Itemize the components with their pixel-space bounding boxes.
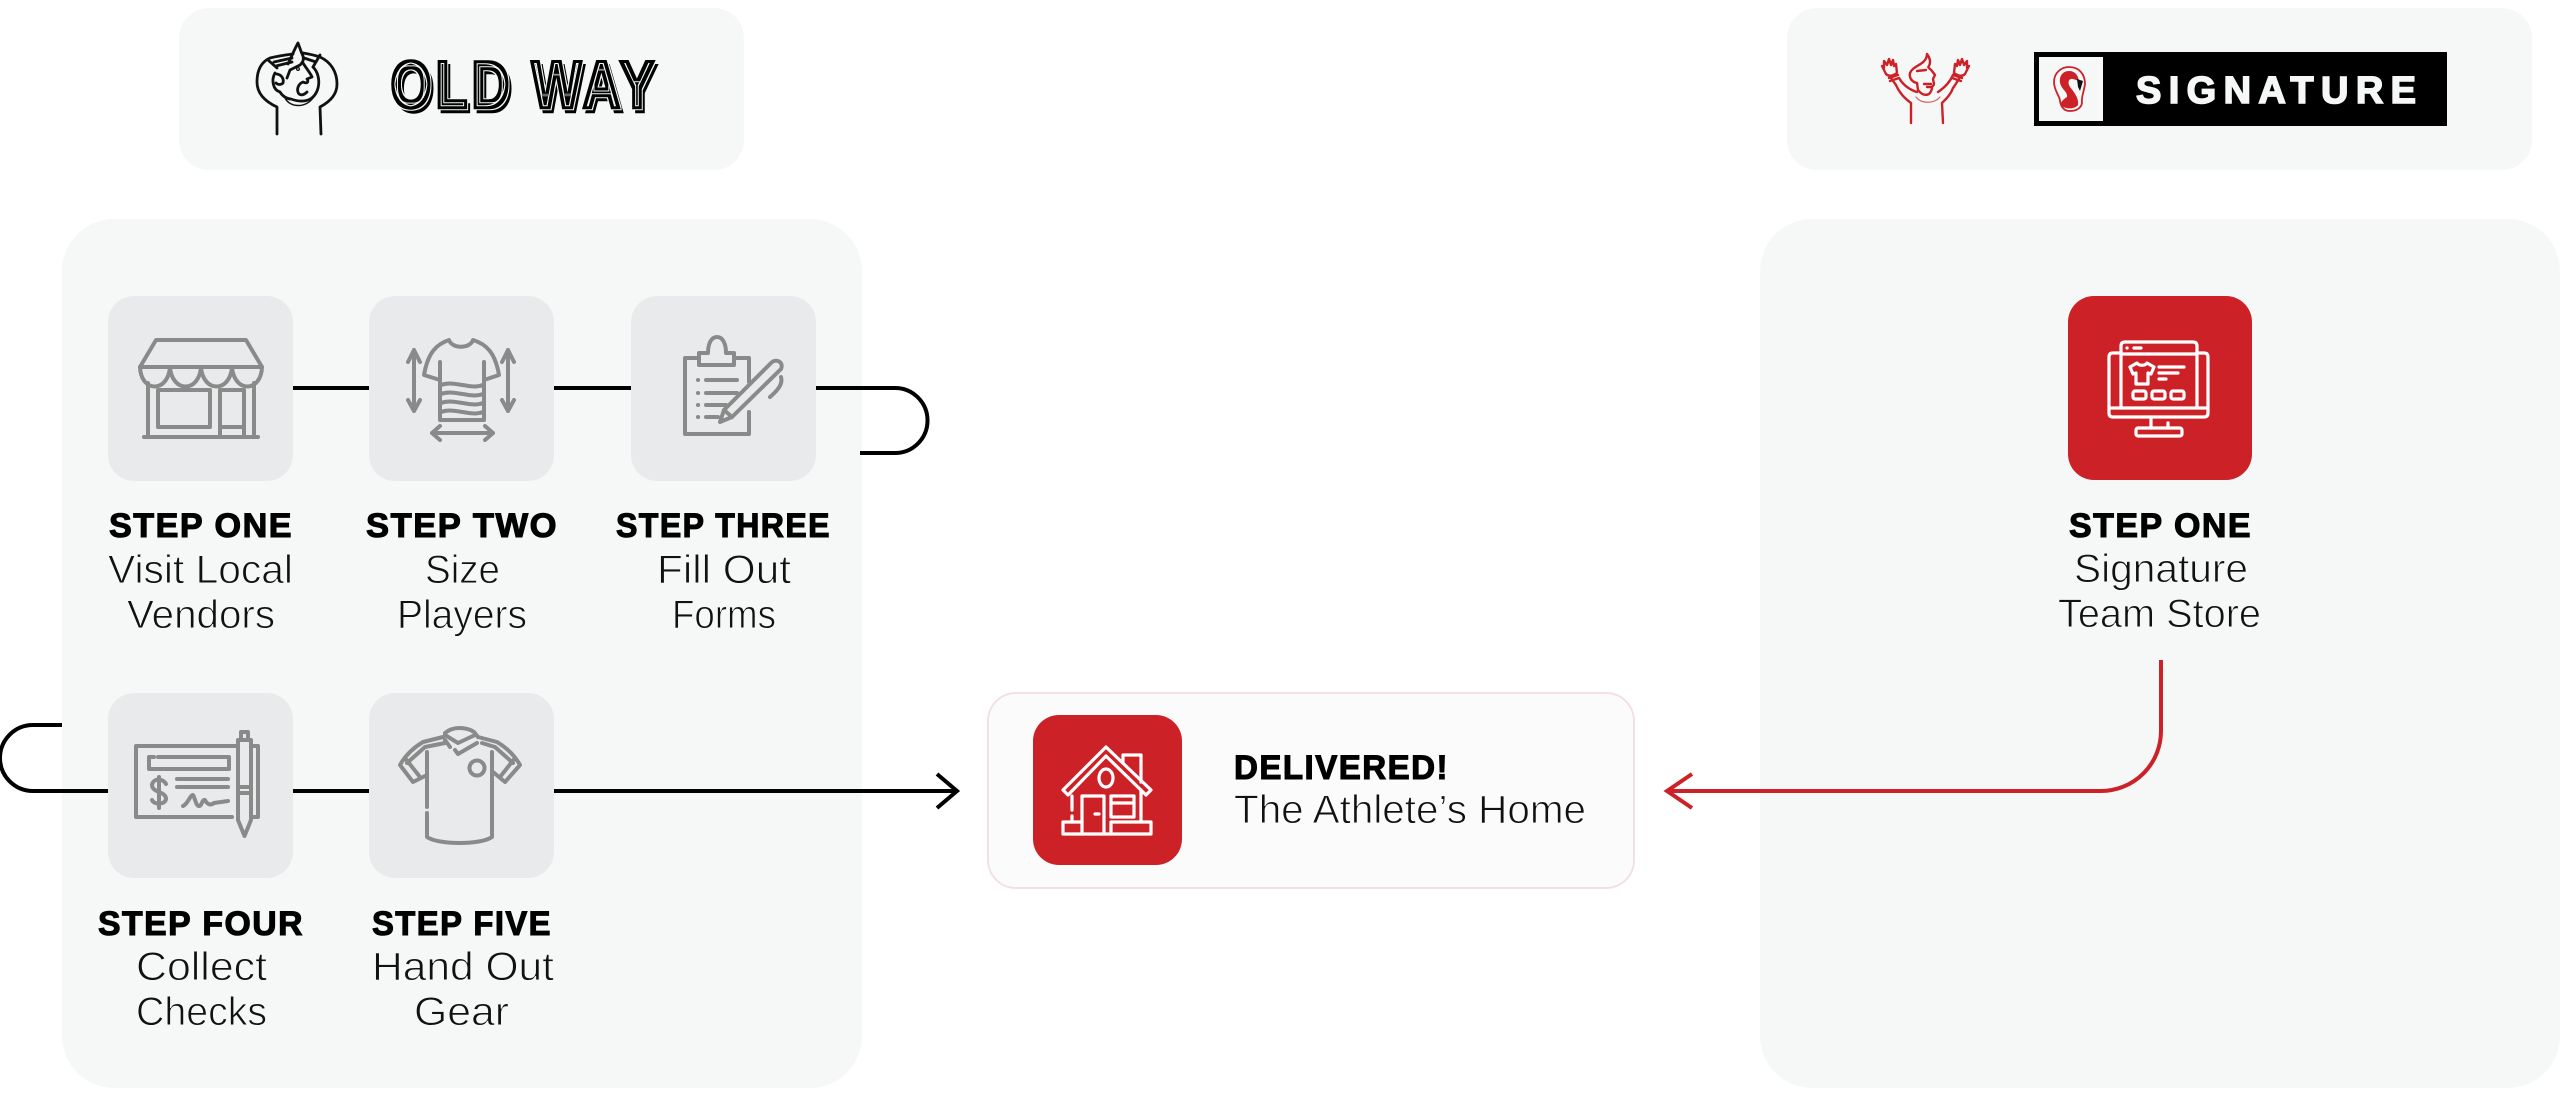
step five: hand out gear: Hand Out <box>372 945 554 989</box>
step four: collect checks <box>98 693 304 1034</box>
step four: collect checks: Checks <box>136 990 267 1034</box>
panel: signature <box>1667 219 2560 1088</box>
step three: fill out forms: Forms <box>672 593 776 637</box>
panel: old way <box>0 219 957 1088</box>
header: signature <box>1787 8 2532 170</box>
step three: fill out forms <box>616 296 831 637</box>
connector: left loop through steps four and five to arrow <box>0 725 957 808</box>
step two: size players: Players <box>397 593 527 637</box>
step one: signature team store: Signature <box>2074 547 2248 591</box>
connector: red arrow to delivered <box>1667 660 2161 808</box>
step five: hand out gear: STEP FIVE <box>372 905 552 943</box>
heading: old way: OLD WAY <box>390 47 658 123</box>
callout: delivered: DELIVERED! <box>1234 749 1449 787</box>
step two: size players: Size <box>425 548 500 592</box>
step two: size players <box>366 296 558 637</box>
connector: step one to three with right loop <box>293 388 928 453</box>
icon: jersey <box>400 728 520 843</box>
step one: signature team store <box>2058 296 2261 636</box>
step one: signature team store: Team Store <box>2058 592 2261 636</box>
icon: storefront <box>140 340 262 437</box>
callout: delivered: The Athlete’s Home <box>1234 788 1586 832</box>
icon: shirt with size arrows <box>408 340 514 440</box>
icon: cheering person <box>1882 54 1969 123</box>
step four: collect checks: Collect <box>136 945 267 989</box>
step four: collect checks: STEP FOUR <box>98 905 304 943</box>
callout: delivered <box>988 693 1634 888</box>
step one: signature team store: STEP ONE <box>2069 507 2252 545</box>
icon: flamingo <box>2054 67 2085 111</box>
step five: hand out gear: Gear <box>414 990 509 1034</box>
icon: check and pen <box>136 732 258 836</box>
step two: size players: STEP TWO <box>366 507 558 545</box>
icon: stressed person <box>257 43 337 134</box>
icon: house <box>1063 747 1151 834</box>
step three: fill out forms: STEP THREE <box>616 507 831 545</box>
step five: hand out gear <box>369 693 554 1034</box>
step one: visit local vendors: Visit Local <box>108 548 293 592</box>
icon: monitor with online store <box>2109 342 2208 436</box>
signature logo <box>2034 52 2447 126</box>
step three: fill out forms: Fill Out <box>657 548 791 592</box>
icon: clipboard and pen <box>685 337 782 434</box>
signature wordmark: SIGNATURE <box>2136 70 2416 112</box>
header: old way <box>179 8 744 170</box>
step one: visit local vendors <box>108 296 293 637</box>
step one: visit local vendors: Vendors <box>127 593 275 637</box>
step one: visit local vendors: STEP ONE <box>109 507 293 545</box>
